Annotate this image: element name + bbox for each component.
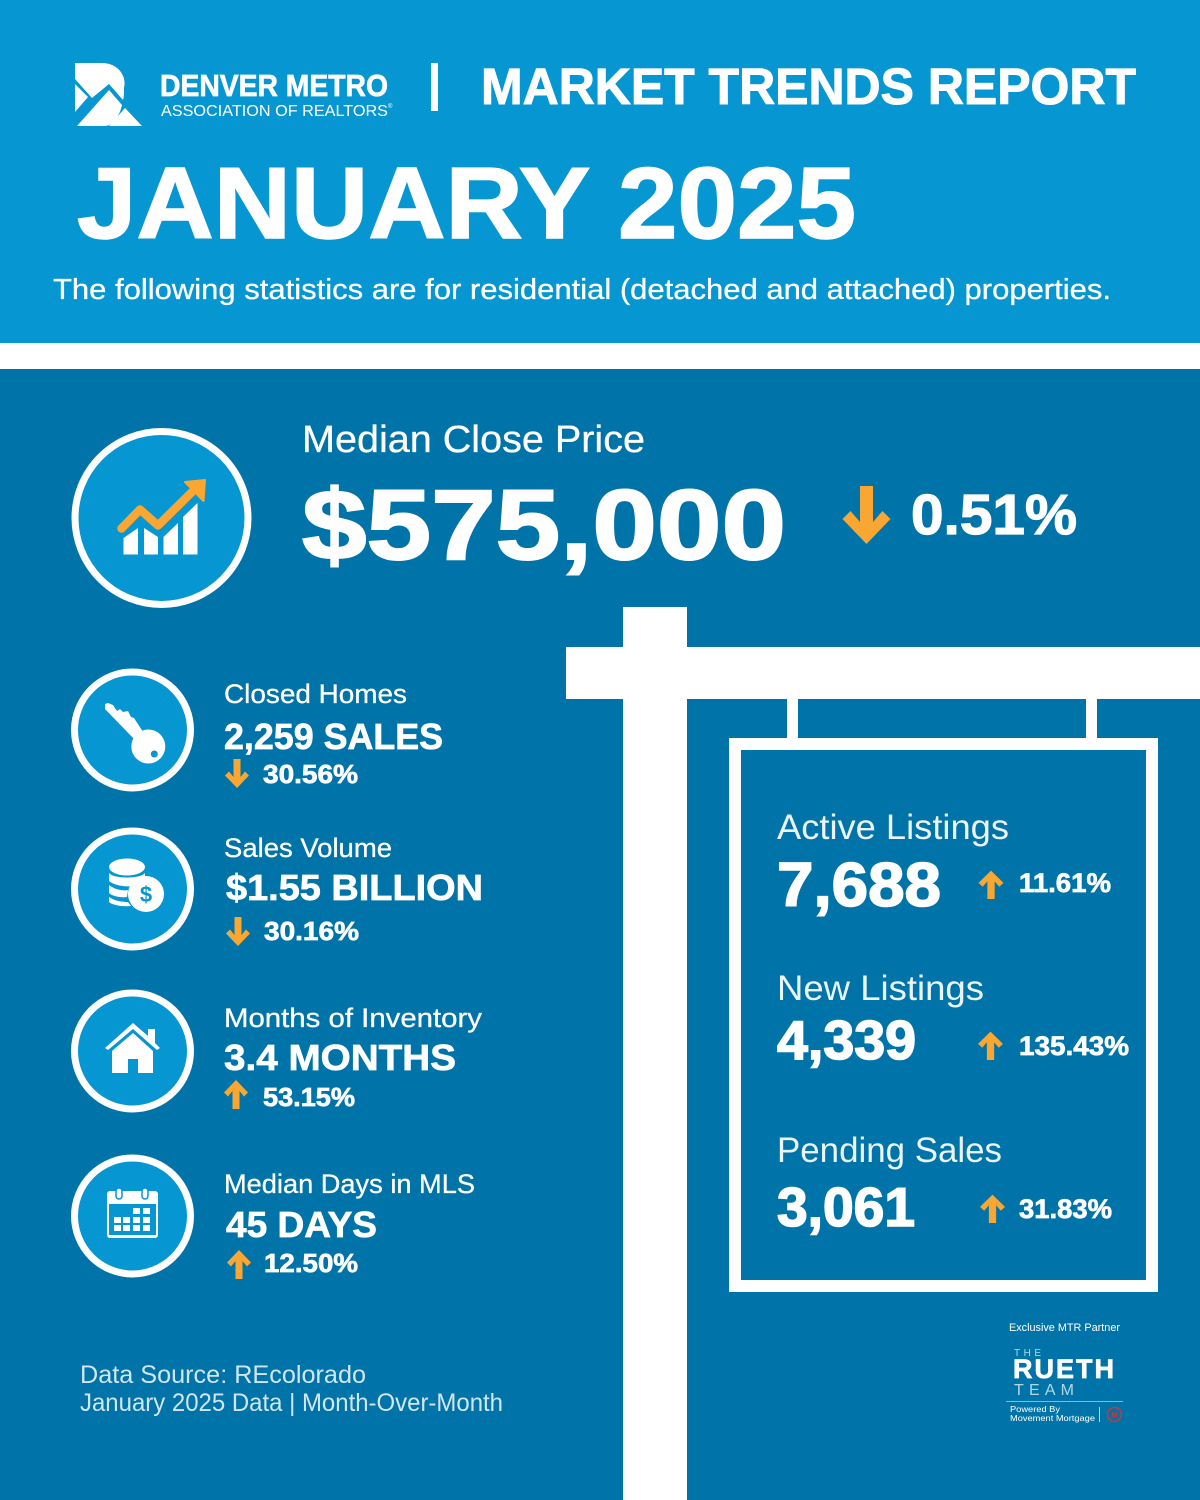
icon: down arrow: [226, 917, 250, 946]
logo wordmark: [160, 68, 393, 120]
icon: up arrow: [227, 1250, 251, 1279]
stat: active listings: [777, 808, 1111, 920]
partner logo: Exclusive MTR Partner: [1009, 1322, 1120, 1334]
stat: active listings: Active Listings: [777, 808, 1009, 847]
stat: closed homes: Closed Homes: [224, 679, 407, 709]
partner logo: [1006, 1322, 1123, 1423]
stat: pending sales: Pending Sales: [777, 1131, 1002, 1170]
stat: new listings: New Listings: [777, 969, 984, 1008]
icon: median price chart: [75, 432, 248, 604]
median close price: Median Close Price: [302, 419, 645, 461]
partner logo: M: [1112, 1412, 1118, 1419]
stat: median days in MLS: 12.50%: [264, 1248, 358, 1278]
stat: median days in MLS: 45 DAYS: [226, 1204, 377, 1245]
subtitle: The following statistics are for residential (detached and attached) properties.: [53, 274, 1111, 306]
icon: up arrow: [979, 871, 1003, 899]
icon: up arrow: [224, 1080, 248, 1109]
stat: closed homes: [74, 672, 443, 789]
icon: down arrow: [842, 486, 890, 544]
stat: months of inventory: 3.4 MONTHS: [224, 1037, 456, 1078]
icon: up arrow: [978, 1032, 1003, 1060]
month heading: JANUARY 2025: [77, 148, 856, 260]
partner logo: Powered By: [1010, 1405, 1060, 1414]
logo wordmark: ASSOCIATION OF REALTORS: [161, 103, 388, 120]
data source note: [80, 1361, 503, 1417]
for-sale sign: [566, 607, 1200, 1500]
stat: pending sales: 31.83%: [1019, 1194, 1112, 1224]
panel: statistics: [0, 369, 1200, 1500]
data source note: Data Source: REcolorado: [80, 1361, 366, 1389]
partner logo: RUETH: [1013, 1354, 1114, 1384]
stat: active listings: 11.61%: [1019, 868, 1111, 898]
stat: months of inventory: Months of Inventory: [224, 1003, 483, 1033]
icon: house: [74, 993, 190, 1109]
median close price: [302, 419, 1077, 580]
stat: closed homes: 30.56%: [263, 759, 358, 789]
stat: active listings: 7,688: [777, 851, 941, 920]
stat: sales volume: $1.55 BILLION: [226, 867, 483, 908]
logo wordmark: ®: [388, 103, 393, 110]
stat: pending sales: 3,061: [777, 1176, 915, 1238]
stat: months of inventory: 53.15%: [263, 1082, 355, 1112]
stat: new listings: 4,339: [777, 1009, 916, 1071]
stat: months of inventory: [74, 993, 483, 1112]
stat: new listings: 135.43%: [1019, 1031, 1129, 1061]
logo wordmark: DENVER METRO: [160, 68, 388, 103]
median close price: 0.51%: [911, 483, 1077, 547]
stat: sales volume: 30.16%: [264, 916, 359, 946]
stat: pending sales: [777, 1131, 1112, 1238]
icon: down arrow: [225, 759, 249, 788]
icon: coins: $: [140, 882, 152, 907]
partner logo: Movement Mortgage: [1010, 1414, 1096, 1423]
icon: up arrow: [980, 1195, 1005, 1223]
icon: coins: [74, 831, 190, 947]
stat: median days in MLS: [74, 1158, 475, 1279]
stat: closed homes: 2,259 SALES: [224, 716, 443, 757]
partner logo: THE: [1014, 1348, 1041, 1359]
divider bar: [431, 63, 438, 111]
stat: sales volume: Sales Volume: [224, 833, 392, 863]
report title: MARKET TRENDS REPORT: [481, 58, 1136, 115]
stat: new listings: [777, 969, 1129, 1071]
median close price: $575,000: [302, 469, 786, 580]
stat: median days in MLS: Median Days in MLS: [224, 1169, 475, 1199]
panel: header: [0, 0, 1200, 343]
stat: sales volume: [74, 831, 483, 947]
icon: Denver Metro logo mark: [75, 63, 142, 126]
icon: calendar: [74, 1158, 190, 1274]
partner logo: TEAM: [1014, 1382, 1074, 1399]
icon: key: [74, 672, 190, 788]
data source note: January 2025 Data | Month-Over-Month: [80, 1389, 503, 1417]
